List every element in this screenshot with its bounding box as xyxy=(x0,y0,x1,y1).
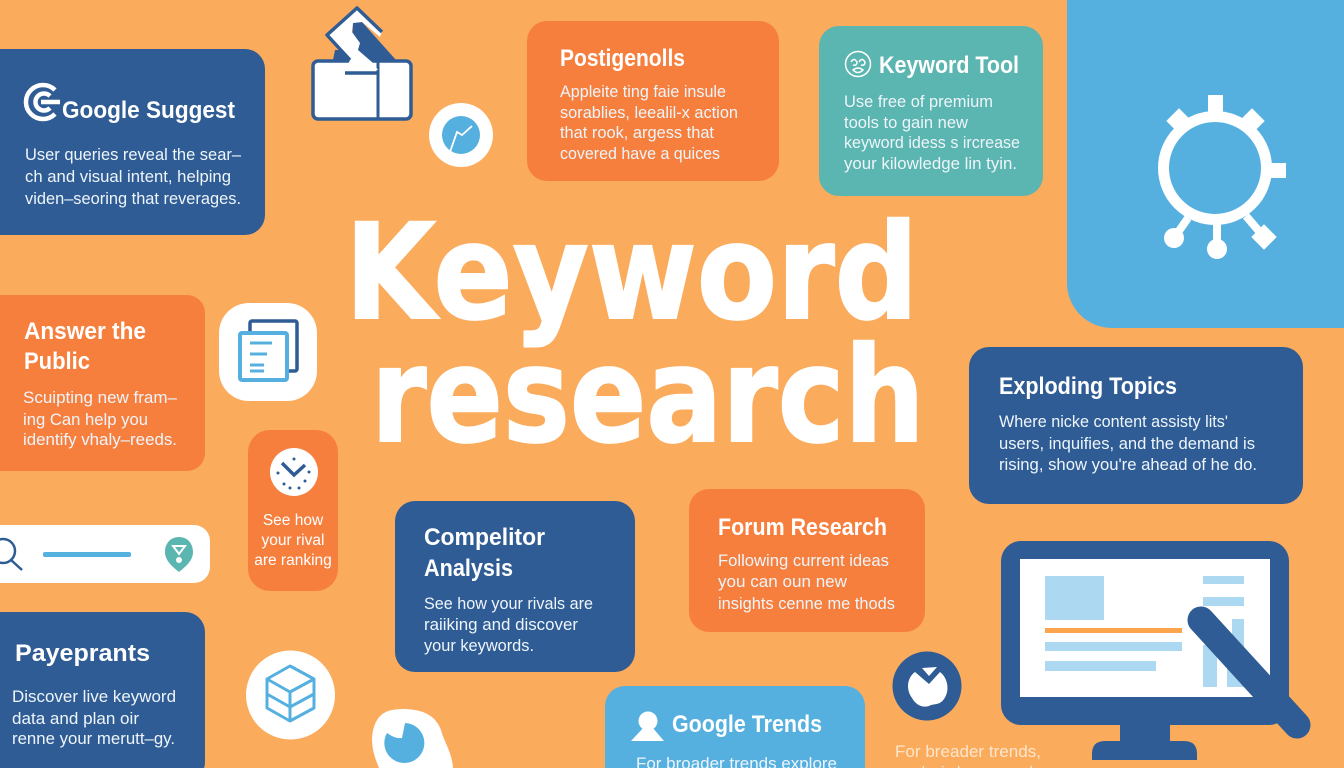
panel: Payeprants xyxy=(0,612,205,768)
search bar xyxy=(0,525,210,583)
icon: documents xyxy=(219,303,317,401)
icon: clock xyxy=(270,448,318,496)
text: Forum Research description: insights cenne me thods xyxy=(718,595,895,613)
heading: Forum Research: Forum Research xyxy=(718,514,887,541)
text: Google Suggest description xyxy=(25,146,242,208)
heading: Answer the Public xyxy=(24,318,146,375)
text: Google Suggest description: viden–seoring that reverages. xyxy=(25,190,241,208)
title xyxy=(345,196,925,473)
panel: Postigenolls xyxy=(527,21,779,181)
panel: Google Suggest xyxy=(0,49,265,235)
text: Keyword Tool description: tools to gain new xyxy=(844,114,968,132)
text: Answer the Public description: ing Can help you xyxy=(23,411,148,429)
panel: Forum Research xyxy=(689,489,925,632)
text: rival ranking: your rival xyxy=(262,532,324,549)
icon: ballot box xyxy=(313,8,411,119)
icon: magnifier xyxy=(0,539,22,570)
heading: Postigenolls: Postigenolls xyxy=(560,45,685,72)
text: Postigenolls description xyxy=(560,83,738,163)
text: Forum Research description xyxy=(718,552,895,613)
text: broader trends note: For breader trends, xyxy=(895,743,1041,761)
heading: Google Suggest: Google Suggest xyxy=(62,97,235,124)
panel: Keyword Tool xyxy=(819,26,1043,196)
text: Keyword Tool description: your kilowledge lin tyin. xyxy=(844,155,1017,173)
text: Keyword Tool description: keyword idess s ircrease xyxy=(844,134,1020,152)
text: Competitor description: your keywords. xyxy=(424,637,534,655)
heading: Payeprants: Payeprants xyxy=(15,640,150,667)
heading: Answer the Public: Answer the xyxy=(24,318,146,345)
heading: Answer the Public: Public xyxy=(24,348,90,375)
icon: trend line badge xyxy=(429,103,493,167)
pen xyxy=(1201,620,1297,725)
search input line xyxy=(43,552,131,557)
text: Payeprants description: Discover live keyword xyxy=(12,688,176,706)
text: Competitor description: raiiking and discover xyxy=(424,616,579,634)
text: Exploding Topics description: Where nicke content assisty lits' xyxy=(999,413,1228,431)
text: Forum Research description: you can oun new xyxy=(718,573,847,591)
text: Payeprants description xyxy=(12,688,176,748)
icon: keyword tool face xyxy=(846,52,870,76)
icon: person xyxy=(631,712,664,741)
text: Keyword Tool description: Use free of premium xyxy=(844,93,993,111)
heading: Keyword Tool: Keyword Tool xyxy=(879,52,1019,79)
text: Postigenolls description: covered have a quices xyxy=(560,145,720,163)
text: Google Suggest description: ch and visual intent, helping xyxy=(25,168,231,186)
text: Exploding Topics description: users, inquifies, and the demand is xyxy=(999,435,1255,453)
text: Exploding Topics description: rising, show you're ahead of he do. xyxy=(999,456,1257,474)
text: Postigenolls description: sorablies, leealil-x action xyxy=(560,104,738,122)
panel: blue corner xyxy=(1067,0,1344,328)
text: Payeprants description: renne your merutt–gy. xyxy=(12,730,175,748)
heading: Compelitor Analysis: Analysis xyxy=(424,555,513,582)
text: Postigenolls description: Appleite ting faie insule xyxy=(560,83,726,101)
text: Exploding Topics description xyxy=(999,413,1257,474)
icon: bottom blob xyxy=(372,709,453,768)
icon: cube xyxy=(246,650,335,740)
text: Postigenolls description: that rook, argess that xyxy=(560,124,714,142)
screen content xyxy=(1045,576,1249,687)
text: Answer the Public description: Scuipting new fram– xyxy=(23,389,178,407)
text: broader trends note xyxy=(895,743,1055,768)
heading: Compelitor Analysis xyxy=(424,524,545,582)
icon: location pin xyxy=(165,537,193,572)
panel: Exploding Topics xyxy=(969,347,1303,504)
text: Answer the Public description: identify vhaly–reeds. xyxy=(23,431,177,449)
icon: Google G xyxy=(26,85,60,119)
text: Competitor description xyxy=(424,595,593,655)
text: Payeprants description: data and plan oir xyxy=(12,710,140,728)
text: Forum Research description: Following current ideas xyxy=(718,552,889,570)
heading: Google Trends: Google Trends xyxy=(672,711,822,738)
icon: gear xyxy=(1164,95,1286,259)
panel: Answer the Public xyxy=(0,295,205,471)
title: Keyword xyxy=(345,196,918,350)
text: Google Suggest description: User queries reveal the sear– xyxy=(25,146,242,164)
text: rival ranking: are ranking xyxy=(254,552,332,569)
text: Answer the Public description xyxy=(23,389,178,449)
title: research xyxy=(371,319,925,473)
panel: rival ranking xyxy=(248,430,338,591)
panel: Google Trends xyxy=(605,686,865,768)
text: rival ranking xyxy=(254,512,332,569)
icon: apple badge xyxy=(892,652,962,720)
text: Competitor description: See how your rivals are xyxy=(424,595,593,613)
heading: Exploding Topics: Exploding Topics xyxy=(999,373,1177,400)
panel: Competitor Analysis xyxy=(395,501,635,672)
icon: monitor with pen xyxy=(1001,541,1297,760)
text: rival ranking: See how xyxy=(263,512,324,529)
text: Keyword Tool description xyxy=(844,93,1020,173)
heading: Compelitor Analysis: Compelitor xyxy=(424,524,545,551)
